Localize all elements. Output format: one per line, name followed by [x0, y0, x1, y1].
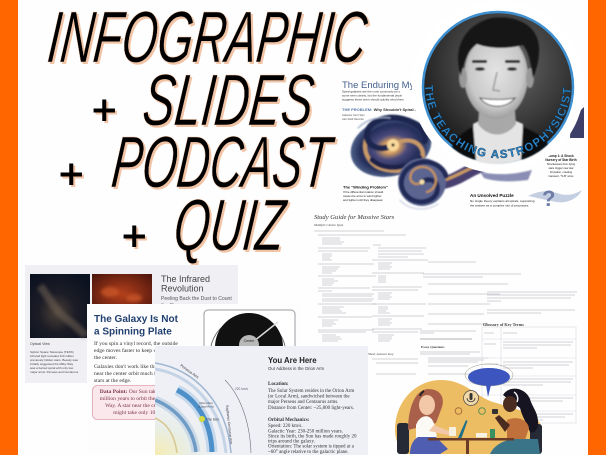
glossary table [482, 327, 576, 423]
multiple choice heading: Multiple Choice Quiz [313, 223, 344, 227]
problem line: THE PROBLEM: Why Shouldn't Spiral A [342, 107, 418, 112]
optical view text: Spitzer Space Telescope (TESS) [30, 350, 74, 354]
portrait neck [478, 98, 516, 134]
panel: galaxy is not a spinning plate slide [87, 304, 302, 455]
vinyl record card: Center [244, 339, 255, 343]
icon: lower spiral galaxy with arm [398, 158, 532, 209]
icon: microphone [464, 390, 478, 406]
optical view text: previously hidden stars. Beauty was [30, 358, 78, 362]
white circle backing [412, 1, 584, 173]
glossary heading: Glossary of Key Terms [483, 322, 524, 327]
portrait shirt [473, 118, 523, 164]
star birth text [545, 154, 577, 178]
portrait badge [412, 10, 581, 172]
icon: question mark swirl [528, 186, 582, 211]
glossary table text lines [484, 333, 573, 420]
location block: (or Local Arm), sandwiched between the [268, 394, 350, 400]
vinyl record card [204, 310, 295, 381]
galactic core glow [155, 420, 200, 455]
small galaxy note: Like Solid Records [342, 117, 364, 121]
essay questions heading: Essay Questions [421, 345, 445, 349]
star birth text: transient, "S-B" arms [549, 174, 574, 178]
green bottle [490, 429, 495, 438]
left woman [408, 389, 449, 454]
slide body text [94, 340, 178, 384]
star birth text: Shockwaves from dying [547, 162, 576, 166]
portrait eyes and brows [472, 60, 520, 71]
unsolved puzzle text [470, 193, 535, 208]
panel: infrared revolution slide [25, 265, 238, 383]
slide body text: stars at the edge. [94, 378, 132, 384]
vinyl arc arrow [211, 317, 285, 346]
title line: slides: + [92, 86, 117, 133]
unsolved puzzle text: An Unsolved Puzzle [470, 193, 514, 198]
title shadow layer: SLIDES [141, 62, 320, 142]
optical view text [30, 350, 79, 374]
milky way dust lane [40, 286, 86, 336]
right orange bar [588, 0, 606, 455]
orbital mechanics block: trips around the galaxy. [268, 440, 315, 444]
slide body text: edge moves faster to keep up with [94, 347, 171, 354]
infographic intro text: suggests these arms should quickly wind them [342, 98, 404, 102]
yellow blob background [395, 380, 542, 454]
location block: The Solar System resides in the Orion Arm [268, 389, 354, 394]
winding problem text: The "Winding Problem" [343, 184, 388, 190]
sun marker [199, 416, 205, 422]
slide title: Revolution [161, 284, 204, 294]
unsolved puzzle text: the answer as a complex mix of processes. [470, 204, 529, 208]
star birth text: Jump 1: A Shock [548, 154, 574, 158]
star birth text: Nursery of Star Birth [545, 158, 577, 162]
winding problem text: cause the arms to wind tighter [343, 194, 382, 198]
portrait disc [423, 12, 573, 162]
spiral arcs [155, 363, 251, 453]
small galaxy note [342, 113, 365, 121]
slide subtitle [161, 296, 232, 309]
star birth text: stars trigger new star [548, 166, 574, 170]
portrait nose shadow [493, 72, 500, 91]
infographic heading: The Enduring Myste [342, 80, 427, 91]
title shadow layer: INFOGRAPHIC [46, 0, 374, 79]
panel: study guide [313, 214, 577, 423]
orbital mechanics block: Since its birth, the Sun has made roughly 20 [268, 434, 357, 440]
speech bubble [465, 364, 513, 397]
data point callout: might take only 10. [113, 410, 157, 416]
optical view text: initially suggested the Milky Way [30, 362, 74, 366]
small galaxy note: Galaxies Can't Spin [342, 113, 365, 117]
slide title [161, 274, 210, 294]
data point callout: million years to orbit the Milky [100, 396, 170, 402]
milky way diagram: (Local Arm) [198, 405, 214, 409]
optical view text: was a barred spiral with only two [30, 366, 74, 370]
unsolved puzzle text: No single theory explains all spirals, supporting [470, 199, 535, 203]
icon: question mark swirl: ? [542, 186, 555, 211]
star birth text: formation, creating [550, 170, 573, 174]
title shadow layer: PODCAST [110, 124, 340, 204]
badge ring text: THE TEACHING ASTROPHYSICIST [424, 84, 571, 158]
milky way diagram: Orion Arm [199, 401, 213, 405]
essay column lines [487, 292, 577, 313]
infographic intro text: Spiral galaxies are the most commonly pe o [342, 90, 401, 94]
optical view caption: Optical View [30, 342, 50, 346]
data point callout: Data Point: Our Sun takes 230 [100, 389, 170, 395]
orbital mechanics block: Orientation: The solar system is tipped at a [268, 444, 355, 450]
title shadow layer [46, 0, 374, 267]
right woman [490, 389, 540, 454]
infographic intro text [342, 90, 404, 102]
infographic intro text: some seen clearly, but the fundamental physi [342, 94, 402, 98]
multiple choice lines column 1 [314, 231, 406, 341]
title shadow layer: + [94, 88, 119, 135]
infrared bright clouds [101, 287, 142, 302]
slide subtitle: Our Address in the Orion Arm [268, 366, 325, 371]
title line: podcast: + [59, 150, 84, 197]
milky way diagram: 220 km/s [235, 387, 248, 391]
location block: Location: [268, 382, 289, 387]
location block: major Perseus and Centaurus arms. [268, 400, 338, 405]
left orange bar [0, 0, 18, 455]
icon: large spiral galaxy [344, 108, 438, 186]
diagram labels: Perseus Arm [179, 364, 199, 380]
vinyl record [215, 313, 283, 381]
table [428, 438, 514, 440]
short answer lines column [420, 262, 521, 333]
slide background [87, 304, 302, 455]
portrait face [464, 33, 528, 119]
study guide title: Study Guide for Massive Stars [314, 214, 395, 221]
podcast illustration [395, 364, 542, 454]
title line: quiz: QUIZ [170, 185, 290, 265]
small icons [455, 408, 485, 414]
portrait hair [458, 17, 539, 78]
chairs [397, 423, 542, 454]
slide subtitle: the Stars [161, 303, 182, 309]
portrait smile [480, 98, 515, 106]
portrait jacket [452, 122, 548, 163]
portrait figure [452, 17, 548, 164]
optical view text: infrared light revealed 110 million [30, 354, 74, 358]
winding problem text [343, 184, 388, 202]
answer key lines [372, 359, 418, 374]
milky way diagram [155, 363, 251, 455]
cup [449, 427, 456, 436]
slide subtitle: Peeling Back the Dust to Count [161, 296, 232, 302]
small upper right galaxy fragment [570, 107, 584, 138]
milky way diagram: The Sun [206, 418, 219, 422]
optical view text: major arms: Perseus and Centaurus [30, 370, 79, 374]
winding problem text: If the differential rotation should [343, 190, 384, 194]
slide body text: the center. [94, 355, 118, 361]
divider [420, 338, 472, 340]
slide background [25, 265, 238, 383]
milky way photo [30, 274, 90, 338]
title shadow layer: QUIZ [172, 187, 292, 267]
slide title: The Infrared [161, 274, 210, 284]
data point callout: Way. A star near the center [105, 403, 165, 409]
essay question lines [420, 352, 488, 374]
title line: slides: SLIDES [139, 60, 318, 140]
tablet [458, 420, 468, 438]
panel: infographic preview [342, 80, 584, 211]
orbital mechanics block: ~60° angle relative to the galactic plane. [268, 450, 349, 455]
title line: podcast: PODCAST [108, 122, 338, 202]
slide title: The Galaxy Is Not [94, 314, 179, 325]
location block [268, 382, 354, 411]
orbital mechanics block [268, 418, 357, 455]
title line: quiz: + [122, 212, 147, 259]
slide body text: Galaxies don't work like this. Stars [94, 364, 172, 370]
multiple choice lines column 2 [372, 245, 428, 341]
data point callout [92, 386, 192, 420]
slide body text: If you spin a vinyl record, the outside [94, 340, 178, 347]
winding problem text: and tighter until they disappear. [343, 198, 383, 202]
orbital mechanics block: Orbital Mechanics: [268, 418, 310, 423]
milky way diagram: Sagittarius Centaurus Arm [225, 405, 233, 445]
slide title: You Are Here [268, 356, 317, 365]
slide body text: near the center orbit much faster than [94, 370, 178, 377]
answer key heading: Short-Answer Key [368, 352, 394, 356]
infrared photo [92, 274, 152, 314]
title shadow layer: + [124, 214, 149, 261]
slide title [94, 314, 179, 338]
slide title: a Spinning Plate [94, 326, 172, 338]
panel: you are here slide [155, 346, 368, 455]
slide background [155, 346, 368, 455]
title [44, 0, 374, 267]
title shadow layer: + [61, 152, 86, 199]
location block: Distance from Center: ~25,800 light-years. [268, 406, 354, 411]
orbital mechanics block: Speed: 220 km/s. [268, 424, 303, 429]
plate [476, 433, 487, 438]
orbital mechanics block: Galactic Year: 230-250 million years. [268, 430, 343, 434]
